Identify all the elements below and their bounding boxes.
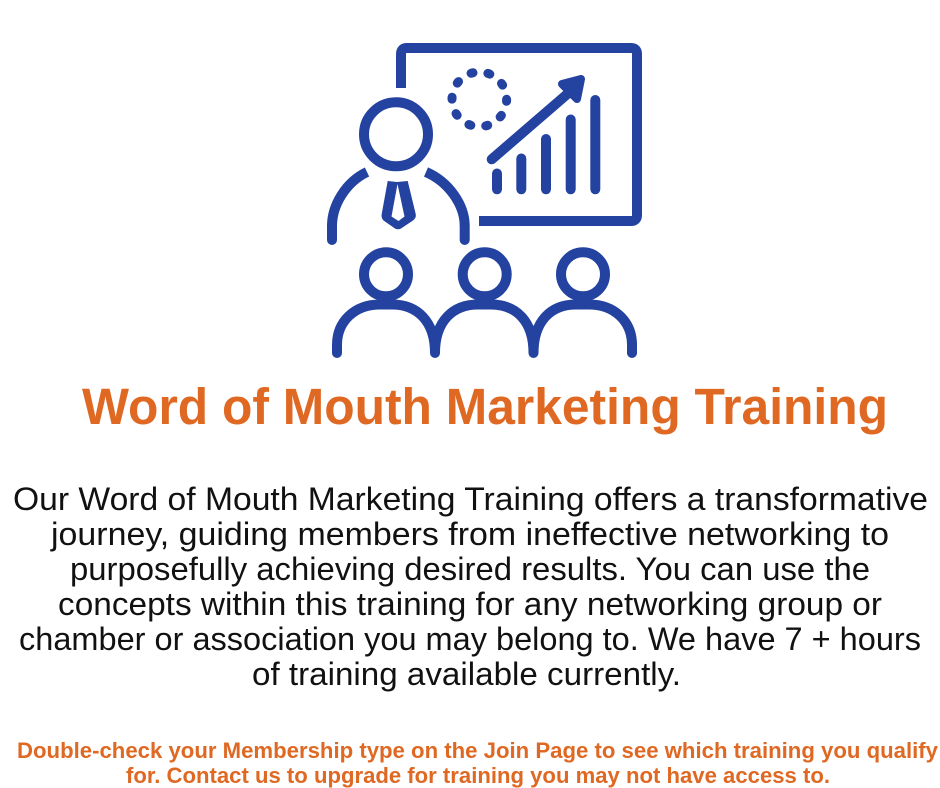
description text block (13, 481, 928, 692)
audience bodies (337, 304, 632, 353)
icon: presenter with chart and audience (332, 48, 637, 353)
description text block: Our Word of Mouth Marketing Training offers a transformative (13, 481, 928, 517)
arrow: rising trend (492, 90, 572, 159)
description text block: journey, guiding members from ineffective networking to (50, 516, 889, 552)
membership note (17, 738, 939, 788)
title: Word of Mouth Marketing Training (82, 378, 888, 435)
description text block: concepts within this training for any networking group or (58, 586, 882, 622)
arrow head (562, 79, 581, 99)
description text block: purposefully achieving desired results. You can use the (70, 551, 870, 587)
description text block: chamber or association you may belong to. We have 7 + hours (19, 621, 921, 657)
membership note: Double-check your Membership type on the Join Page to see which training you qualify (17, 738, 939, 763)
icon: dotted circle (452, 72, 507, 127)
description text block: of training available currently. (252, 656, 681, 692)
presenter head (364, 102, 428, 166)
membership note: for. Contact us to upgrade for training you may not have access to. (126, 763, 830, 788)
presentation board (401, 48, 637, 221)
presenter shoulders (332, 172, 367, 226)
presenter tie (382, 181, 416, 229)
audience heads (364, 252, 605, 296)
bar chart (497, 100, 595, 189)
